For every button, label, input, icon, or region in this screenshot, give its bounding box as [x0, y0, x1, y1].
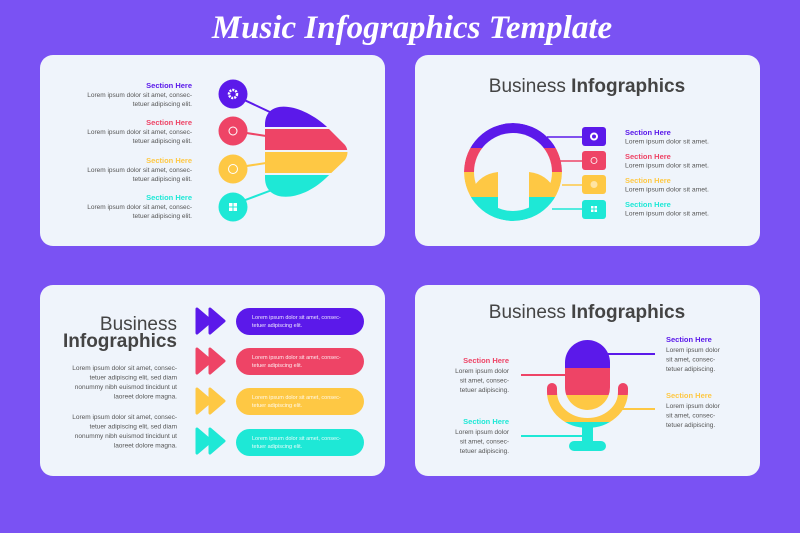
- connector lines: [240, 98, 272, 202]
- paragraph: [72, 365, 177, 450]
- text blocks mic: [666, 335, 721, 429]
- text blocks mic: sit amet, consec-: [666, 356, 715, 364]
- heading: Business Infographics: [489, 302, 685, 323]
- paragraph: Lorem ipsum dolor sit amet, consec-: [72, 414, 177, 421]
- chart: headphones: [464, 123, 562, 221]
- panel: headphones: [415, 55, 760, 246]
- text blocks mic: Section Here: [666, 391, 712, 400]
- panel: pick: [40, 55, 385, 246]
- text blocks headphones: [625, 128, 709, 218]
- text blocks pick: Section Here: [146, 81, 192, 90]
- panel: microphone: Section Here: [463, 417, 509, 426]
- text blocks pick: Lorem ipsum dolor sit amet, consec-: [87, 167, 192, 174]
- paragraph: nonummy nibh euismod tincidunt ut: [75, 433, 177, 440]
- text blocks headphones: Lorem ipsum dolor sit amet.: [625, 210, 709, 218]
- panel: microphone: tetuer adipiscing.: [460, 387, 509, 394]
- text blocks pick: tetuer adipiscing elit.: [133, 213, 192, 220]
- pills: tetuer adipiscing elit.: [252, 403, 303, 409]
- text blocks pick: Lorem ipsum dolor sit amet, consec-: [87, 204, 192, 211]
- connector lines: [521, 354, 655, 436]
- heading: [63, 314, 177, 352]
- pills: Lorem ipsum dolor sit amet, consec-: [252, 355, 341, 361]
- chart: pick: [265, 106, 348, 197]
- connectors: [547, 137, 584, 209]
- text blocks headphones: Section Here: [625, 152, 671, 161]
- pills: Lorem ipsum dolor sit amet, consec-: [252, 315, 341, 321]
- icon boxes: [582, 127, 606, 219]
- icons: double arrows: [197, 309, 224, 453]
- text blocks pick: [87, 81, 192, 220]
- pills: tetuer adipiscing elit.: [252, 363, 303, 369]
- panel: microphone: Lorem ipsum dolor: [455, 368, 510, 375]
- heading: Business: [100, 314, 177, 335]
- panel: microphone: Section Here: [463, 356, 509, 365]
- text blocks pick: tetuer adipiscing elit.: [133, 101, 192, 108]
- text blocks headphones: Section Here: [625, 128, 671, 137]
- pills: tetuer adipiscing elit.: [252, 444, 303, 450]
- text blocks mic: Section Here: [666, 335, 712, 344]
- panel: arrows: [40, 285, 385, 476]
- text blocks headphones: Lorem ipsum dolor sit amet.: [625, 186, 709, 194]
- text blocks headphones: Section Here: [625, 200, 671, 209]
- text blocks pick: Lorem ipsum dolor sit amet, consec-: [87, 129, 192, 136]
- paragraph: Lorem ipsum dolor sit amet, consec-: [72, 365, 177, 372]
- paragraph: tetuer adipiscing elit, sed diam: [90, 374, 177, 382]
- text blocks mic: sit amet, consec-: [666, 412, 715, 420]
- pills: tetuer adipiscing elit.: [252, 323, 303, 329]
- paragraph: laoreet dolore magna.: [114, 394, 177, 400]
- panel: microphone: sit amet, consec-: [460, 378, 509, 384]
- panel: microphone: tetuer adipiscing.: [460, 448, 509, 455]
- panel: microphone: Lorem ipsum dolor: [455, 429, 510, 436]
- pills: Lorem ipsum dolor sit amet, consec-: [252, 436, 341, 442]
- text blocks headphones: Lorem ipsum dolor sit amet.: [625, 138, 709, 146]
- text blocks pick: Section Here: [146, 193, 192, 202]
- text blocks pick: tetuer adipiscing elit.: [133, 176, 192, 183]
- heading: Infographics: [63, 331, 177, 352]
- text blocks headphones: Lorem ipsum dolor sit amet.: [625, 162, 709, 170]
- paragraph: laoreet dolore magna.: [114, 442, 177, 450]
- text blocks mic: Lorem ipsum dolor: [666, 403, 721, 410]
- text blocks pick: Lorem ipsum dolor sit amet, consec-: [87, 92, 192, 99]
- text blocks mic: tetuer adipiscing.: [666, 422, 715, 429]
- pills: Lorem ipsum dolor sit amet, consec-: [252, 395, 341, 401]
- text blocks headphones: Section Here: [625, 176, 671, 185]
- title: Music Infographics Template: [211, 10, 612, 46]
- pills: [236, 308, 364, 456]
- paragraph: tetuer adipiscing elit, sed diam: [90, 424, 177, 430]
- text blocks mic: tetuer adipiscing.: [666, 366, 715, 373]
- heading: Business Infographics: [489, 76, 685, 97]
- panel: microphone: sit amet, consec-: [460, 438, 509, 446]
- text blocks pick: Section Here: [146, 156, 192, 165]
- panel: microphone: [415, 285, 760, 476]
- text blocks pick: Section Here: [146, 118, 192, 127]
- paragraph: nonummy nibh euismod tincidunt ut: [75, 384, 177, 391]
- text blocks mic: Lorem ipsum dolor: [666, 347, 721, 354]
- text blocks pick: tetuer adipiscing elit.: [133, 138, 192, 145]
- chart: microphone: [547, 340, 628, 451]
- icons: circles: [218, 80, 248, 222]
